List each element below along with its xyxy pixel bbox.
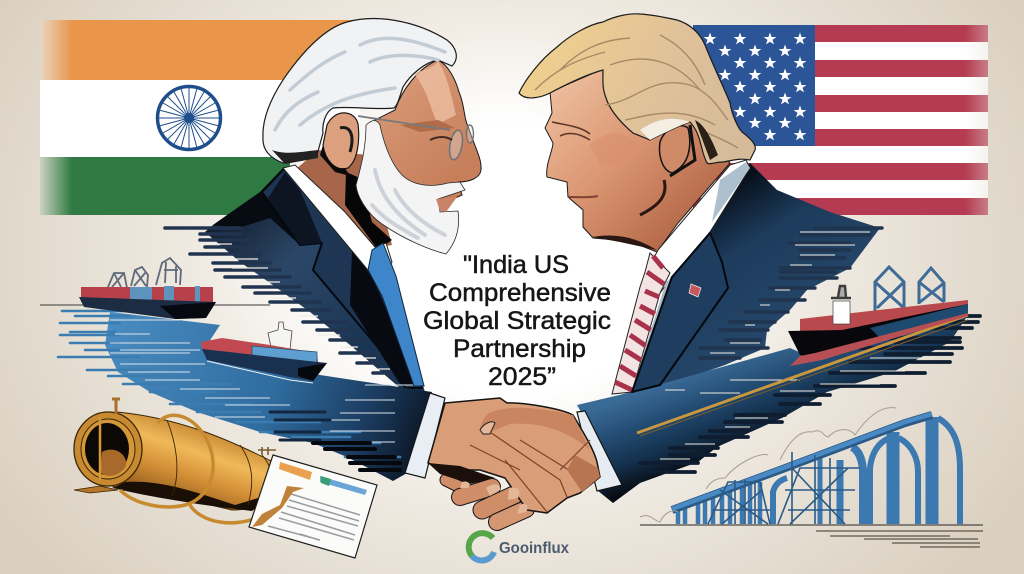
jacket streaks — [700, 228, 882, 358]
title text — [423, 251, 611, 391]
icon: flag stars — [704, 32, 806, 140]
sleeve streaks — [640, 316, 980, 472]
lower fingers — [446, 480, 526, 522]
US leader sleeve cuff — [577, 411, 622, 491]
title text: Comprehensive — [429, 279, 611, 307]
India flag — [40, 20, 360, 215]
ear — [323, 113, 359, 169]
US leader jacket — [640, 163, 882, 395]
fingernails — [460, 481, 528, 514]
hair shading — [275, 38, 445, 130]
water streaks — [58, 311, 400, 457]
flag pin — [689, 284, 701, 297]
pipe opening — [74, 412, 142, 486]
title text: 2025” — [488, 363, 556, 391]
steam wisps — [640, 408, 896, 522]
document card — [249, 455, 377, 558]
pipe bracket — [252, 486, 304, 527]
jacket lapel — [262, 168, 422, 388]
ship: centre — [201, 322, 327, 383]
jacket lapel — [632, 233, 728, 392]
India leader jacket — [165, 168, 425, 392]
bridge deck — [672, 415, 932, 510]
icon: ashoka chakra — [158, 86, 220, 150]
title text: Global Strategic — [423, 307, 611, 335]
jacket streaks — [165, 228, 400, 373]
gold stripe — [637, 315, 968, 433]
face and neck — [545, 68, 730, 252]
pipeline bridge — [640, 408, 983, 547]
India leader sleeve cuff — [405, 393, 445, 478]
ship: left far — [79, 258, 216, 319]
card text lines — [268, 494, 360, 540]
beard — [356, 120, 465, 254]
icon: logo ring — [469, 533, 494, 560]
card header bars — [279, 462, 312, 480]
USA flag — [693, 25, 988, 215]
bridge columns — [678, 417, 960, 524]
ship: right large — [788, 267, 968, 366]
title text: "India US — [463, 251, 569, 279]
tie — [368, 243, 424, 386]
logo: Gooinflux: Gooinflux — [499, 540, 569, 557]
India leader portrait — [263, 19, 481, 386]
hair — [263, 19, 456, 163]
shirt front — [632, 274, 678, 390]
shirt collar — [283, 165, 392, 290]
palm and back of hand — [428, 398, 600, 513]
handshake — [428, 398, 600, 522]
glasses — [358, 116, 450, 130]
ear — [660, 126, 690, 173]
US leader portrait — [519, 14, 755, 394]
hair — [519, 14, 755, 164]
face — [370, 60, 481, 205]
title text: Partnership — [453, 335, 586, 363]
tie — [612, 253, 670, 394]
hair shading — [535, 35, 738, 148]
neck — [295, 150, 392, 248]
US leader sleeve — [577, 315, 980, 503]
shirt collar — [645, 160, 750, 293]
water and ships panel — [40, 258, 432, 481]
lips — [436, 197, 457, 212]
bridge trusses — [708, 452, 860, 524]
pipeline — [74, 399, 282, 523]
pipe rings — [120, 415, 281, 523]
water with sleeve — [105, 312, 432, 481]
logo: Gooinflux — [469, 533, 569, 560]
